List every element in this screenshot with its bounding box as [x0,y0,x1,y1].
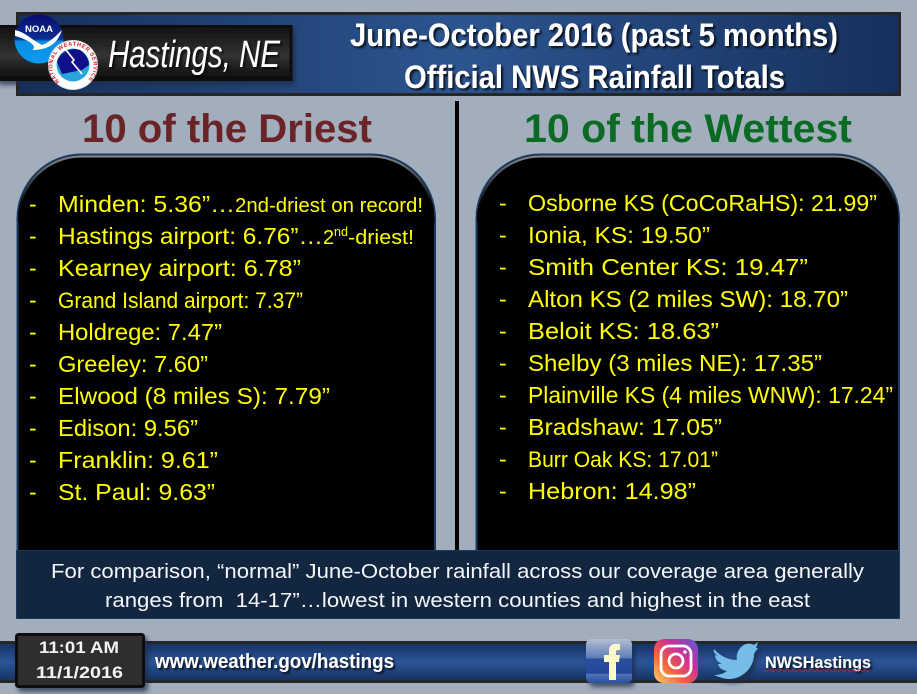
list: driest stations: - [29,255,37,281]
panel background: driest [18,154,435,552]
list: driest stations: -driest! [348,227,414,249]
list: wettest stations: - [499,446,507,472]
panel background: wettest [476,154,899,552]
list: driest stations: - [29,351,37,377]
location name: Hastings, NE [108,34,281,76]
list: driest stations: - [29,383,37,409]
header banner [18,14,900,95]
list: wettest stations: - [499,222,507,248]
list: driest stations: - [29,223,37,249]
list: wettest stations: Shelby (3 miles NE): 17.35” [528,350,822,376]
footer bar [0,642,917,682]
list: wettest stations: - [499,350,507,376]
list: wettest stations: - [499,318,507,344]
list: wettest stations: Osborne KS (CoCoRaHS): 21.99” [528,190,877,216]
list: wettest stations [499,190,893,504]
list: wettest stations: Beloit KS: 18.63” [528,318,719,344]
list: driest stations: Minden: 5.36”… [58,191,235,217]
timestamp box: 11:01 AM [39,638,119,657]
callout: normal rainfall comparison [16,550,900,618]
list: wettest stations: Alton KS (2 miles SW): 18.70” [528,286,848,312]
list: driest stations: - [29,447,37,473]
list: driest stations: nd [334,224,348,239]
list: driest stations: - [29,415,37,441]
list: driest stations: Hastings airport: 6.76”… [58,223,323,249]
list: driest stations: Edison: 9.56” [58,415,198,441]
list: driest stations: 2nd-driest on record! [235,195,423,217]
list: wettest stations: Burr Oak KS: 17.01” [528,447,718,472]
panel: driest [18,107,435,552]
list: wettest stations: Hebron: 14.98” [528,478,696,504]
icon: Twitter [714,642,758,679]
timestamp box: 11/1/2016 [36,663,123,682]
list: wettest stations: Smith Center KS: 19.47” [528,254,808,280]
timestamp box [16,634,144,686]
list: wettest stations: Ionia, KS: 19.50” [528,222,710,248]
list: driest stations: - [29,287,37,313]
divider [455,101,459,550]
list: wettest stations: Plainville KS (4 miles WNW): 17.24” [528,382,893,408]
list: driest stations: - [29,479,37,505]
list: driest stations: - [29,191,37,217]
website url: www.weather.gov/hastings [154,651,394,673]
list: driest stations: St. Paul: 9.63” [58,479,215,505]
icon: Instagram [654,639,698,683]
list: driest stations: Greeley: 7.60” [58,351,208,377]
list: driest stations: - [29,319,37,345]
list: driest stations: Elwood (8 miles S): 7.79” [58,383,330,409]
list: wettest stations: - [499,478,507,504]
callout: normal rainfall comparison: ranges from 14-17”…lowest in western counties and highest in the east [105,589,810,612]
icon: NOAA logo [14,14,64,64]
icon: NWS logo: NATIONAL WEATHER SERVICE [48,42,98,84]
list: wettest stations: - [499,190,507,216]
location plate [0,26,291,80]
icon: Facebook [586,639,632,683]
heading: driest: 10 of the Driest [82,107,372,151]
list: driest stations: Franklin: 9.61” [58,447,218,473]
list: wettest stations: - [499,382,507,408]
social handle: NWSHastings [765,654,871,672]
title: Official NWS Rainfall Totals [404,59,785,95]
list: wettest stations: - [499,286,507,312]
list: driest stations [29,191,423,505]
list: driest stations: 2 [323,227,334,249]
heading: wettest: 10 of the Wettest [524,107,852,151]
callout: normal rainfall comparison: For comparison, “normal” June-October rainfall across our coverage area generally [51,560,865,583]
list: driest stations: Grand Island airport: 7.37” [58,288,303,313]
title [350,17,838,95]
title: June-October 2016 (past 5 months) [350,17,838,53]
panel: wettest [476,107,899,552]
list: wettest stations: - [499,414,507,440]
list: wettest stations: Bradshaw: 17.05” [528,414,722,440]
icon: NOAA logo: NOAA [25,24,53,35]
list: wettest stations: - [499,254,507,280]
list: driest stations: Kearney airport: 6.78” [58,255,301,281]
list: driest stations: Holdrege: 7.47” [58,319,222,345]
